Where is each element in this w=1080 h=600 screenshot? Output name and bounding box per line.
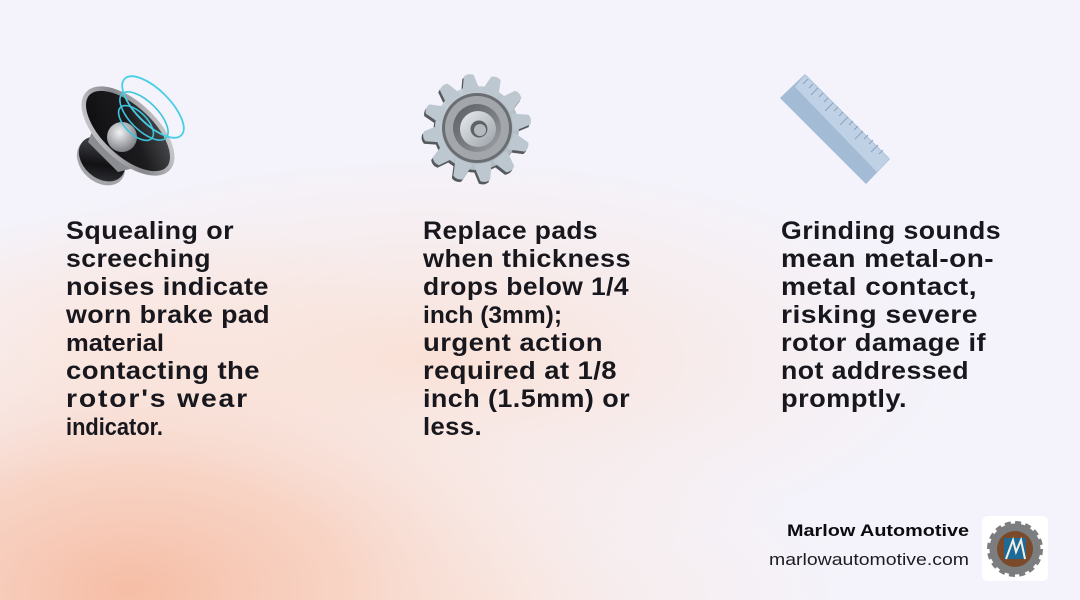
text: grinding sounds: mean metal-on- bbox=[781, 245, 994, 273]
text: replace pads: inch (1.5mm) or bbox=[423, 385, 630, 413]
icon: ruler bbox=[781, 75, 889, 183]
text: squealing noises: material bbox=[66, 330, 164, 357]
text: squealing noises: Squealing or bbox=[66, 217, 234, 245]
text: replace pads bbox=[422, 217, 631, 441]
text: replace pads: less. bbox=[423, 413, 482, 441]
brand: company name and website: marlowautomotive.com bbox=[769, 550, 969, 569]
text: replace pads: Replace pads bbox=[423, 217, 598, 245]
text: grinding sounds: metal contact, bbox=[781, 273, 977, 301]
icon: speaker with sound waves bbox=[68, 67, 193, 195]
logo: Marlow Automotive badge bbox=[982, 516, 1048, 581]
text: replace pads: inch (3mm); bbox=[423, 302, 562, 329]
brand: company name and website: Marlow Automotive bbox=[787, 521, 969, 540]
text: grinding sounds: promptly. bbox=[781, 385, 907, 413]
text: replace pads: required at 1/8 bbox=[423, 357, 617, 385]
text: squealing noises: contacting the bbox=[66, 357, 260, 385]
text: replace pads: drops below 1/4 bbox=[423, 273, 629, 301]
text: squealing noises: noises indicate bbox=[66, 273, 269, 301]
text: grinding sounds: risking severe bbox=[781, 301, 978, 329]
text: grinding sounds: not addressed bbox=[781, 357, 969, 385]
text: grinding sounds bbox=[781, 217, 1001, 413]
text: replace pads: urgent action bbox=[423, 329, 603, 357]
text: squealing noises: indicator. bbox=[66, 414, 163, 441]
text: squealing noises: screeching bbox=[66, 245, 211, 273]
text: grinding sounds: Grinding sounds bbox=[781, 217, 1001, 245]
text: squealing noises bbox=[65, 217, 270, 441]
brand: company name and website bbox=[769, 521, 969, 569]
text: grinding sounds: rotor damage if bbox=[781, 329, 986, 357]
icon: gear bbox=[420, 73, 532, 186]
text: replace pads: when thickness bbox=[422, 245, 631, 273]
text: squealing noises: worn brake pad bbox=[65, 301, 270, 329]
text: squealing noises: rotor's wear bbox=[66, 385, 249, 413]
